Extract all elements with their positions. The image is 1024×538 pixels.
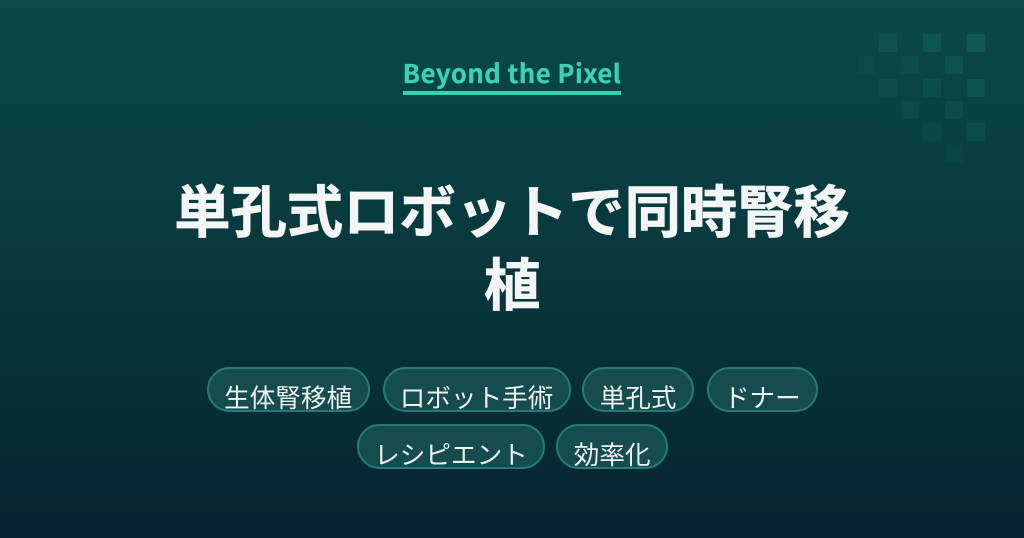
tag: recipient: レシピエント xyxy=(374,435,528,472)
title: 単孔式ロボットで同時腎移 xyxy=(174,168,850,248)
tag: recipient xyxy=(357,424,545,469)
decorative pixel grid xyxy=(879,34,985,141)
tag: donor xyxy=(707,367,818,412)
tag: living kidney transplant: 生体腎移植 xyxy=(224,378,352,415)
tag: efficiency xyxy=(556,424,668,469)
tag: donor: ドナー xyxy=(724,378,801,415)
tag: robotic surgery xyxy=(383,367,571,412)
title xyxy=(174,168,850,322)
tags xyxy=(207,367,818,472)
brand label with underline: Beyond the Pixel xyxy=(403,54,621,91)
tag: single port: 単孔式 xyxy=(600,378,677,415)
tag: efficiency: 効率化 xyxy=(574,435,651,472)
tag: robotic surgery: ロボット手術 xyxy=(400,378,553,415)
title: 植 xyxy=(484,241,540,322)
tag: living kidney transplant xyxy=(207,367,370,412)
tag: single port xyxy=(582,367,694,412)
